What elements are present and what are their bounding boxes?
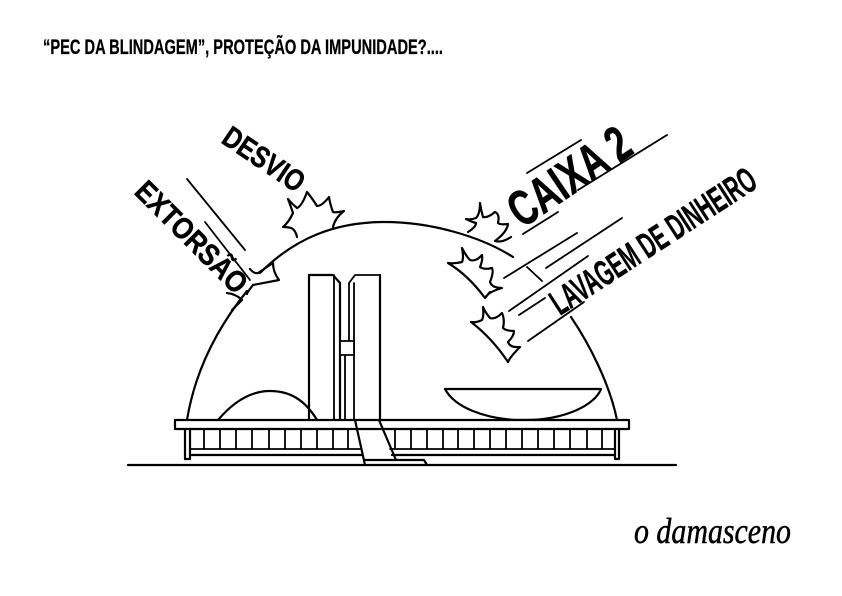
chamber bowl (445, 389, 601, 420)
twin towers (309, 275, 380, 420)
congress dome (187, 222, 617, 420)
colonnade (204, 429, 602, 449)
label: desvio: DESVIO (216, 120, 311, 199)
ground line (128, 464, 676, 466)
label: extorsao: EXTORSÃO (128, 174, 255, 300)
burst: desvio (283, 192, 344, 237)
national congress building (128, 275, 676, 465)
signature: o damasceno (634, 511, 791, 551)
senate dome (218, 391, 317, 420)
burst: caixa (466, 203, 511, 242)
impact bursts (227, 192, 520, 362)
label: caixa 2: CAIXA 2 (497, 115, 642, 238)
platform (175, 420, 629, 429)
burst: extorsao (227, 263, 279, 310)
motion lines (187, 135, 667, 341)
burst: lavagem (471, 307, 520, 362)
burst: dinheiro (448, 248, 502, 298)
title: “PEC DA BLINDAGEM”, PROTEÇÃO DA IMPUNIDADE?.... (43, 36, 443, 59)
ramp (355, 420, 427, 465)
